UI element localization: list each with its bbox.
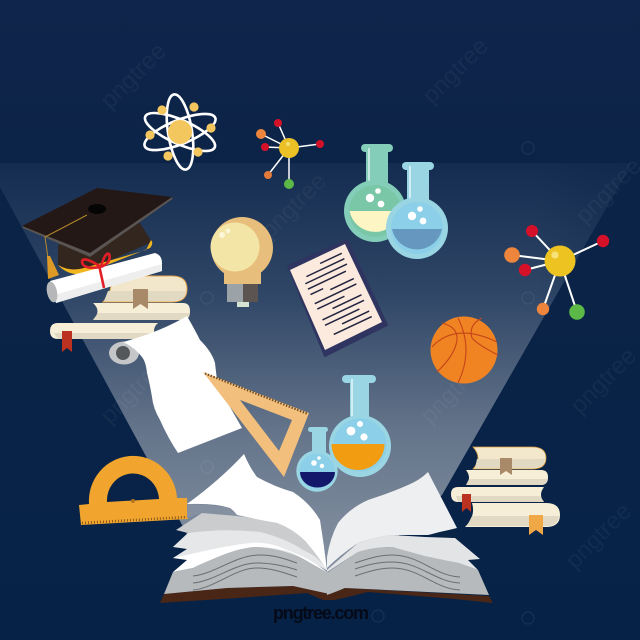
icon: light bulb <box>210 217 273 307</box>
icon: protractor <box>79 456 188 525</box>
left page one <box>173 513 327 570</box>
right white page <box>327 472 457 568</box>
icon: orange flask <box>329 375 391 477</box>
icon: set square <box>203 372 309 477</box>
left stack of books <box>50 276 190 352</box>
icon: diploma <box>45 253 162 303</box>
book 1 <box>103 276 187 302</box>
grey shadow leaf <box>187 504 237 518</box>
left page three <box>173 543 328 573</box>
icon: atom <box>140 93 220 171</box>
icon: small molecule <box>256 119 324 189</box>
right stack of books <box>451 447 560 535</box>
watermark pattern: pngtree <box>95 38 172 114</box>
book 2 <box>93 303 190 320</box>
scroll <box>109 316 242 453</box>
left page two <box>173 530 328 571</box>
cap base <box>58 223 152 273</box>
icon: green flask <box>344 144 406 242</box>
watermark logo: pngtree.com <box>273 603 368 623</box>
book 3 <box>451 487 544 502</box>
tassel <box>45 215 87 258</box>
left white page <box>187 454 327 570</box>
watermark pattern: pngtree <box>255 168 332 244</box>
icon: large molecule <box>504 225 609 320</box>
navy notch <box>427 529 457 538</box>
book 4 <box>465 503 560 527</box>
gold band <box>58 240 152 274</box>
right text lines <box>355 555 460 590</box>
left text lines <box>193 555 297 590</box>
tan bookmark <box>133 289 148 309</box>
icon: graduation cap <box>22 188 172 279</box>
watermark pattern <box>95 33 640 574</box>
book 3 <box>50 323 158 339</box>
watermark pattern: pngtree <box>565 343 640 419</box>
ribbon <box>82 254 110 288</box>
open book <box>160 454 493 603</box>
icon: blue flask <box>386 162 448 259</box>
right page block <box>327 547 489 595</box>
tan bookmark <box>500 458 512 475</box>
red bookmark <box>462 494 471 512</box>
watermark pattern: pngtree <box>415 353 492 429</box>
icon: document <box>288 240 387 356</box>
icon: small navy flask <box>296 427 338 492</box>
left page block <box>164 547 330 594</box>
orange bookmark <box>529 515 543 535</box>
watermark pattern: pngtree <box>95 353 172 429</box>
icon: basketball <box>430 316 498 384</box>
light beam <box>0 163 632 600</box>
red bookmark <box>62 331 72 352</box>
right fan <box>327 535 480 572</box>
book 1 <box>473 447 546 469</box>
watermark pattern: pngtree <box>417 33 494 109</box>
copyright marks <box>201 142 534 624</box>
mortarboard <box>22 188 172 255</box>
book cover <box>160 586 493 603</box>
watermark pattern: pngtree <box>560 498 637 574</box>
book 2 <box>466 470 548 485</box>
